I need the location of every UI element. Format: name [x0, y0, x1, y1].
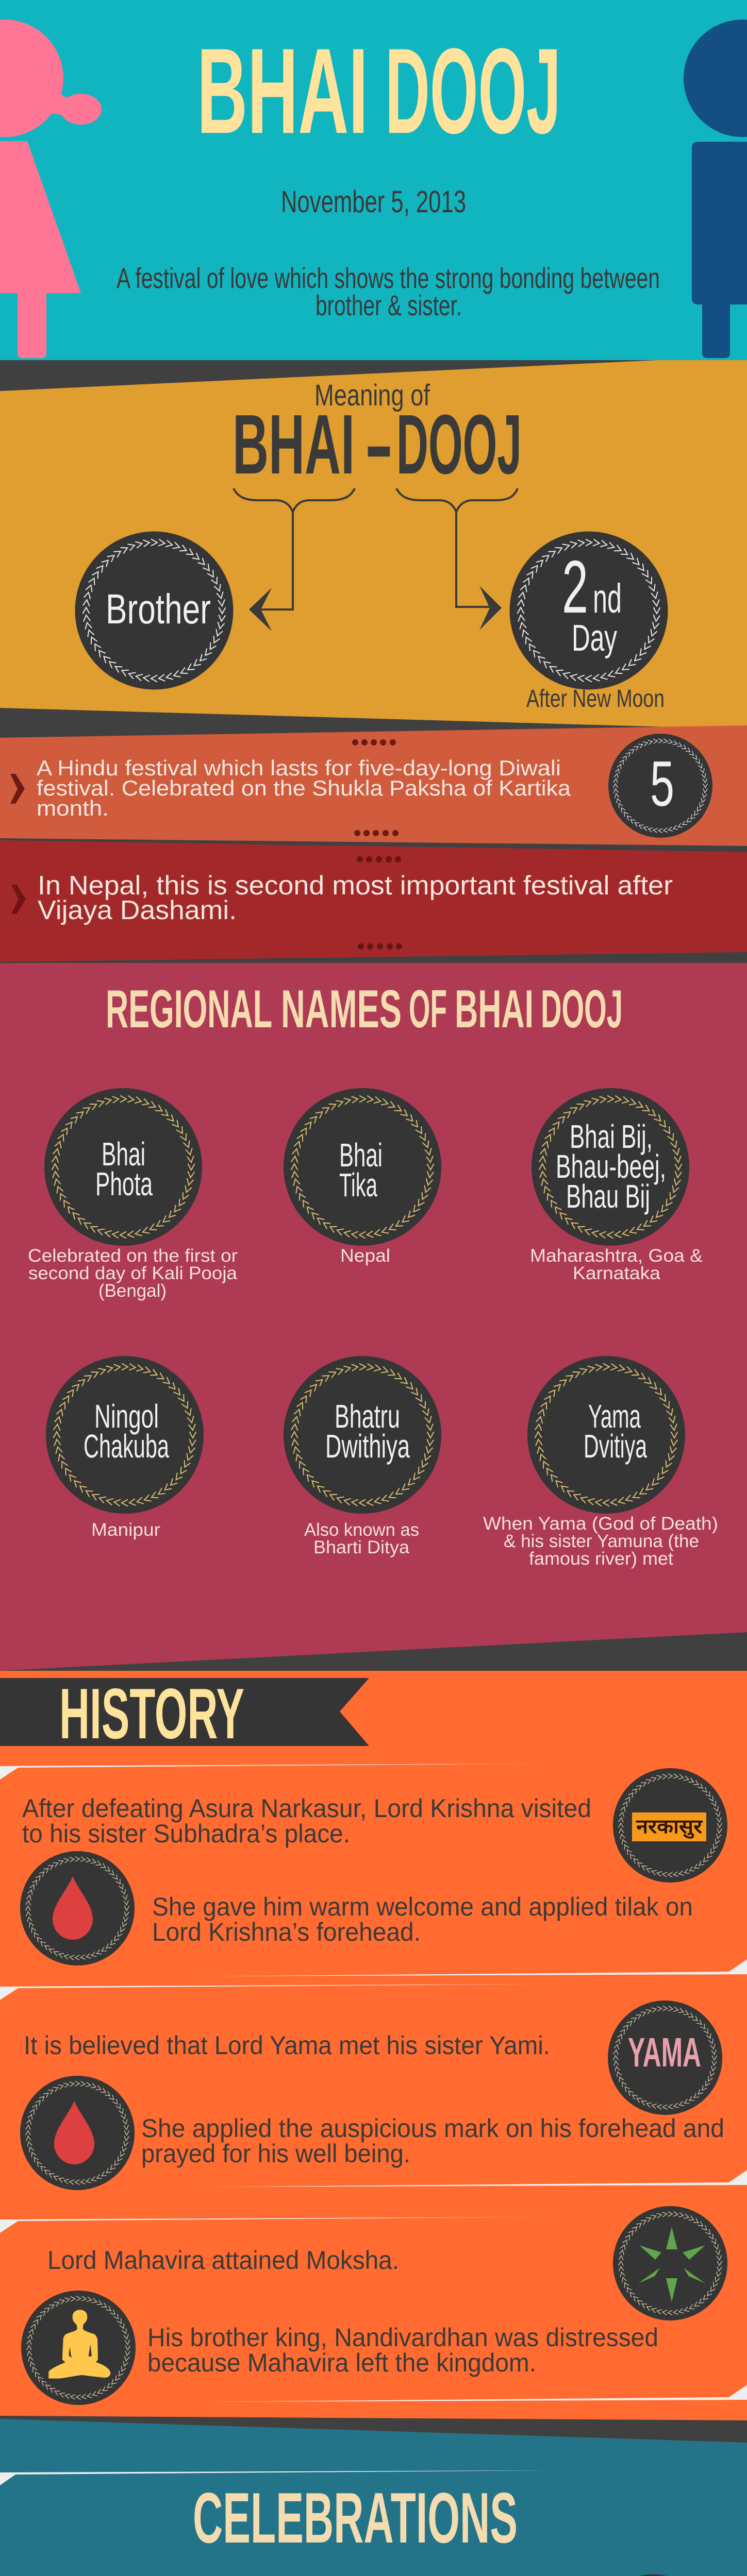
text: narkasur: After defeating Asura Narkasur, Lord Krishna visited	[22, 1794, 591, 1823]
caption: bengal: Celebrated on the first or	[28, 1246, 238, 1266]
panel: five day festival	[0, 725, 747, 846]
badge: bhatru dwithiya	[280, 1347, 453, 1523]
icon: yama label: YAMA	[628, 2029, 701, 2075]
text: warm welcome: Lord Krishna’s forehead.	[152, 1918, 421, 1946]
badge: bhai phota: Bhai	[102, 1136, 145, 1173]
badge: bhai phota	[41, 1079, 213, 1255]
heading: meaning of: Meaning of	[314, 379, 430, 412]
panel: regional names	[0, 963, 747, 1671]
badge: ningol chakuba: Ningol	[94, 1398, 159, 1435]
panel: celebrations	[0, 2419, 747, 2576]
text: auspicious mark: She applied the auspicious mark on his forehead and	[141, 2114, 724, 2143]
icon: green star	[611, 2200, 736, 2327]
text: nandivardhan: His brother king, Nandivardhan was distressed	[147, 2323, 658, 2352]
caption: bharti ditya: Bharti Ditya	[313, 1537, 410, 1557]
badge: brother: Brother	[106, 586, 211, 633]
panel: header	[0, 0, 747, 361]
badge: yama dvitiya	[524, 1347, 696, 1523]
badge: ningol chakuba: Chakuba	[84, 1428, 169, 1465]
badge: bhai bij: Bhai Bij,	[570, 1118, 653, 1155]
text: yama: It is believed that Lord Yama met his sister Yami.	[24, 2031, 550, 2060]
icon: tilak drop	[18, 1845, 143, 1972]
text: nepal: In Nepal, this is second most important festival after	[38, 871, 673, 901]
heading: bhai-dooj: -	[364, 397, 393, 492]
date: November 5, 2013	[281, 184, 466, 219]
heading: bhai-dooj: BHAI	[233, 397, 355, 492]
badge: yama dvitiya: Yama	[588, 1398, 641, 1435]
heading: regional names: DOOJ	[541, 979, 623, 1039]
divider strip	[0, 838, 747, 852]
caption: nepal: Nepal	[340, 1246, 390, 1266]
badge: bhai bij: Bhau-beej,	[556, 1148, 666, 1185]
heading: regional names: NAMES	[281, 979, 402, 1039]
panel: meaning of bhai dooj	[0, 360, 747, 738]
dots top	[352, 739, 396, 745]
badge: 2nd day: nd	[593, 575, 622, 621]
dots top	[357, 856, 401, 862]
badge: 5: 5	[650, 749, 674, 820]
text: hindu festival: month.	[37, 796, 109, 820]
caption: bengal: second day of Kali Pooja	[28, 1263, 238, 1283]
badge: ningol chakuba	[43, 1347, 215, 1523]
badge: 2nd day: Day	[572, 618, 617, 659]
caption: yama and yamuna: When Yama (God of Death)	[483, 1514, 718, 1534]
caption: yama and yamuna: & his sister Yamuna (the	[504, 1531, 699, 1551]
badge: bhai tika: Tika	[339, 1166, 377, 1204]
arrow: brace to second day	[396, 488, 518, 630]
badge: bhai phota: Phota	[95, 1165, 153, 1202]
subtitle: brother & sister.	[316, 289, 462, 321]
icon: narkasur label	[611, 1762, 736, 1889]
arrow: brace to brother	[234, 488, 355, 631]
text: auspicious mark: prayed for his well being.	[141, 2139, 410, 2168]
caption: bharti ditya: Also known as	[304, 1520, 419, 1540]
dots bottom	[358, 943, 402, 950]
caption: yama and yamuna: famous river) met	[529, 1549, 673, 1569]
text: warm welcome: She gave him warm welcome and applied tilak on	[152, 1892, 693, 1921]
badge: 2nd day	[507, 523, 679, 699]
heading: regional names: BHAI	[455, 979, 534, 1039]
text: nandivardhan: because Mahavira left the kingdom.	[147, 2348, 536, 2377]
badge: bhai tika: Bhai	[339, 1137, 383, 1174]
panel: nepal note	[0, 840, 747, 963]
panel: history	[0, 1671, 747, 2420]
caption: manipur: Manipur	[91, 1520, 160, 1540]
text: mahavira: Lord Mahavira attained Moksha.	[47, 2246, 399, 2275]
heading: regional names: OF	[409, 979, 447, 1039]
icon: boy figure	[684, 20, 747, 358]
icon: tilak drop	[18, 2070, 143, 2197]
badge: bhai bij	[528, 1079, 701, 1255]
text: narkasur: to his sister Subhadra’s place.	[22, 1819, 350, 1848]
badge: bhai bij: Bhau Bij	[566, 1178, 650, 1215]
icon: chevron marker	[10, 774, 25, 804]
caption: maharashtra: Maharashtra, Goa &	[530, 1246, 703, 1266]
text: hindu festival: festival. Celebrated on the Shukla Paksha of Kartika	[37, 776, 571, 800]
badge: bhatru dwithiya: Dwithiya	[325, 1428, 410, 1465]
heading: regional names: REGIONAL	[106, 979, 272, 1039]
icon: narkasur label: नरकासुर	[636, 1816, 703, 1839]
heading: bhai-dooj: DOOJ	[396, 397, 522, 492]
caption: after new moon: After New Moon	[526, 685, 665, 713]
dots bottom	[354, 830, 399, 836]
divider strip	[0, 2416, 747, 2443]
badge: bhatru dwithiya: Bhatru	[335, 1398, 400, 1435]
badge: brother	[72, 523, 244, 699]
icon: meditating figure	[19, 2284, 144, 2412]
text: hindu festival: A Hindu festival which lasts for five-day-long Diwali	[37, 756, 561, 780]
icon: chevron marker	[11, 885, 26, 914]
heading: celebrations: CELEBRATIONS	[193, 2478, 518, 2558]
icon: yama label	[606, 1994, 731, 2122]
badge: bhai tika	[280, 1079, 453, 1255]
title: BHAI	[197, 23, 368, 159]
icon: brother and sister	[598, 2574, 708, 2576]
badge: 5	[606, 728, 720, 844]
heading ribbon: history: HISTORY	[59, 1674, 244, 1754]
title: DOOJ	[385, 23, 561, 159]
text: nepal: Vijaya Dashami.	[38, 895, 237, 925]
badge: 2nd day: 2	[562, 545, 588, 629]
caption: maharashtra: Karnataka	[573, 1263, 661, 1283]
badge: yama dvitiya: Dvitiya	[584, 1428, 647, 1465]
caption: bengal: (Bengal)	[98, 1281, 167, 1301]
icon: girl figure	[0, 20, 102, 358]
